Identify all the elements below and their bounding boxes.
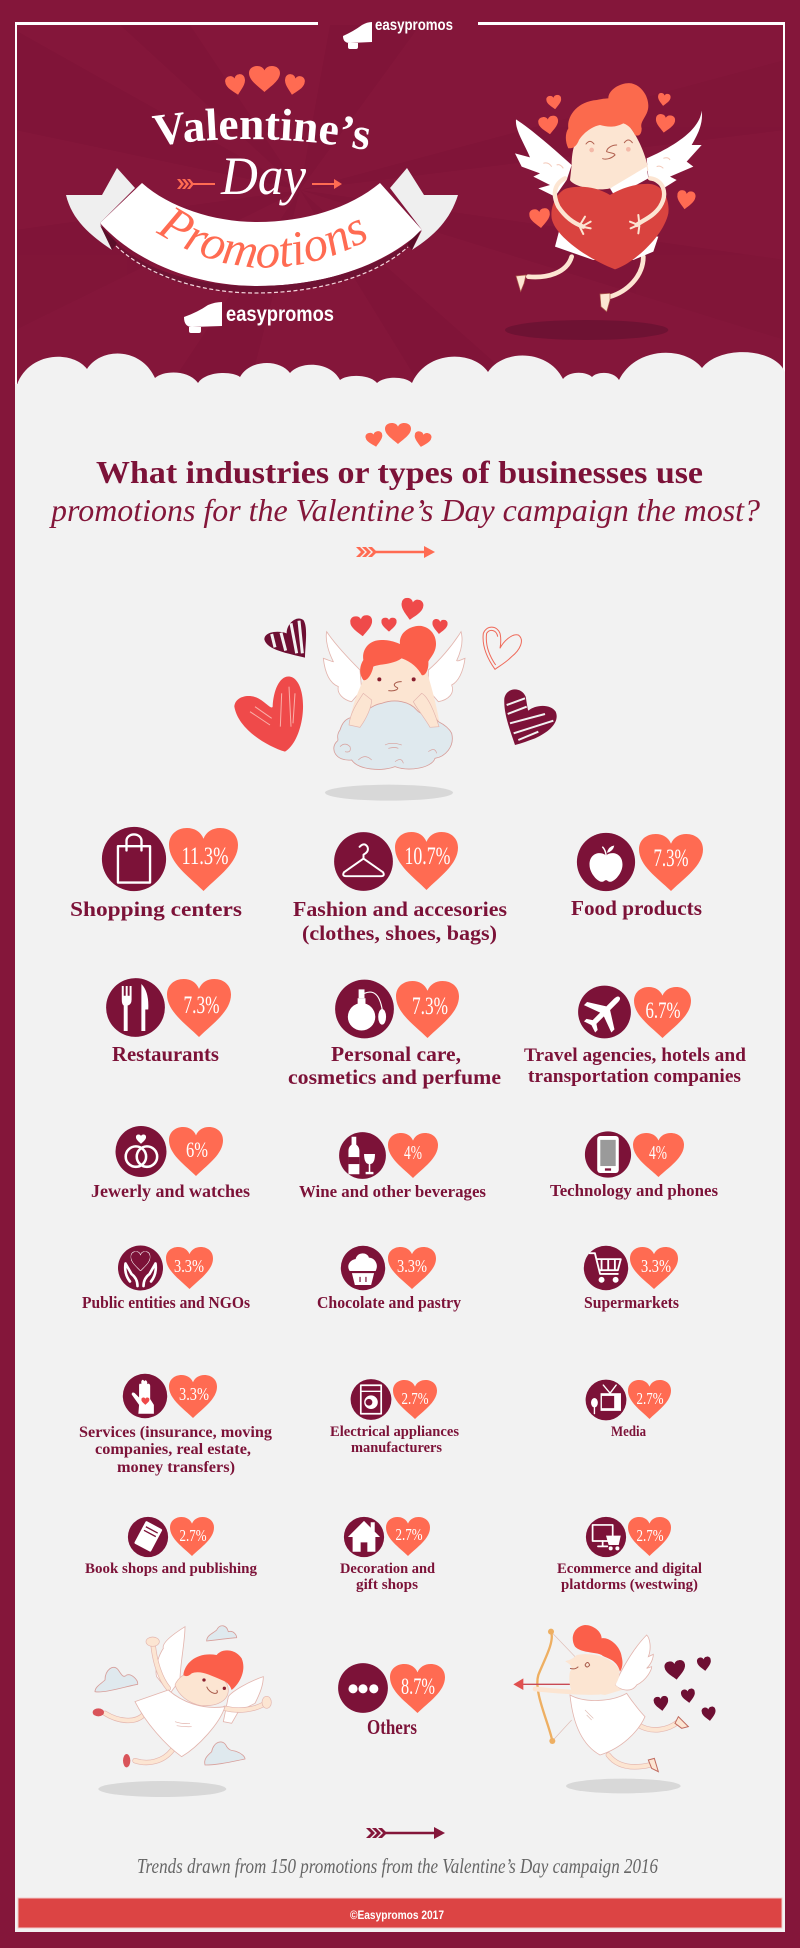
section subheading: promotions for the Valentine’s Day campaign the most? xyxy=(49,492,760,528)
easypromos logo: easypromos xyxy=(226,303,334,326)
illustration: cupid with bow and arrow xyxy=(513,1625,717,1793)
item: services: companies, real estate, xyxy=(95,1441,251,1458)
footer bar xyxy=(18,1898,782,1928)
item: electrical appliances: manufacturers xyxy=(351,1440,442,1456)
item: decoration and gift shops xyxy=(340,1517,436,1593)
item: fashion and accesories: Fashion and accesories xyxy=(293,897,507,921)
item: technology and phones: 4% xyxy=(649,1142,667,1164)
item: ecommerce and digital xyxy=(557,1517,702,1593)
item: personal care xyxy=(288,980,501,1089)
item: chocolate and pastry: 3.3% xyxy=(397,1256,427,1276)
scribble heart red xyxy=(234,677,303,752)
ribbon banner xyxy=(66,168,458,293)
item: shopping centers: Shopping centers xyxy=(70,897,242,921)
section hearts xyxy=(365,423,432,449)
item: personal care: Personal care, xyxy=(331,1042,461,1066)
item: technology and phones xyxy=(550,1131,718,1200)
item: public entities and NGOs xyxy=(82,1246,251,1312)
item: book shops and publishing: 2.7% xyxy=(180,1526,207,1545)
item: jewelry and watches xyxy=(91,1126,250,1201)
item: services: Services (insurance, moving xyxy=(79,1424,272,1441)
scribble heart dark xyxy=(504,689,557,745)
item: food products: Food products xyxy=(571,896,702,920)
title: Promotions: Promotions xyxy=(156,207,366,268)
item: media: Media xyxy=(611,1424,647,1440)
item: electrical appliances xyxy=(330,1379,459,1456)
footer arrow xyxy=(366,1827,445,1839)
item: wine and other beverages: 4% xyxy=(404,1142,422,1164)
item: media xyxy=(586,1380,671,1440)
easypromos logo xyxy=(184,302,334,333)
item: chocolate and pastry: Chocolate and pastry xyxy=(317,1293,462,1312)
scribble heart striped xyxy=(264,619,306,658)
item: personal care: 7.3% xyxy=(412,993,448,1020)
item: jewelry and watches: Jewerly and watches xyxy=(91,1181,250,1201)
item: media: 2.7% xyxy=(636,1389,664,1408)
small easypromos logo xyxy=(343,17,453,49)
item: supermarkets xyxy=(584,1246,680,1312)
illustration: flying cupid with clouds xyxy=(93,1626,271,1797)
header light rays xyxy=(15,25,785,385)
item: decoration and gift shops: 2.7% xyxy=(396,1525,423,1544)
illustration: cupid on a cloud with hearts xyxy=(234,597,557,801)
scribble heart outline xyxy=(483,627,521,669)
item: book shops and publishing xyxy=(85,1517,257,1577)
item: decoration and gift shops: Decoration and xyxy=(340,1561,436,1577)
item: ecommerce and digital: platdorms (westwing) xyxy=(561,1577,698,1593)
item: fashion and accesories: 10.7% xyxy=(404,843,450,870)
item: services xyxy=(79,1374,272,1476)
item: decoration and gift shops: gift shops xyxy=(356,1577,418,1593)
small easypromos logo: easypromos xyxy=(375,17,453,34)
item: ecommerce and digital: 2.7% xyxy=(636,1526,664,1545)
item: electrical appliances: 2.7% xyxy=(402,1389,429,1408)
title hearts xyxy=(224,66,306,97)
item: food products xyxy=(571,833,703,920)
item: shopping centers xyxy=(70,827,242,921)
item: fashion and accesories xyxy=(293,832,507,945)
header frame xyxy=(15,22,785,384)
item: wine and other beverages: Wine and other beverages xyxy=(299,1182,486,1201)
title: Day: Day xyxy=(220,146,306,206)
item: services: money transfers) xyxy=(117,1459,235,1476)
item: others xyxy=(338,1663,445,1739)
item: electrical appliances: Electrical appliances xyxy=(330,1424,459,1440)
source note: Trends drawn from 150 promotions from the Valentine’s Day campaign 2016 xyxy=(137,1854,658,1878)
item: wine and other beverages xyxy=(299,1132,486,1201)
section heading: What industries or types of businesses use xyxy=(96,454,703,490)
item: jewelry and watches: 6% xyxy=(186,1137,208,1162)
item: restaurants: Restaurants xyxy=(112,1042,219,1066)
item: restaurants: 7.3% xyxy=(184,992,220,1019)
item: services: 3.3% xyxy=(179,1384,209,1404)
item: fashion and accesories: (clothes, shoes, bags) xyxy=(302,921,497,945)
item: shopping centers: 11.3% xyxy=(182,843,228,870)
item: food products: 7.3% xyxy=(654,845,688,872)
content panel xyxy=(15,352,785,1932)
item: supermarkets: 3.3% xyxy=(641,1256,671,1276)
item: technology and phones: Technology and phones xyxy=(550,1181,718,1200)
item: ecommerce and digital: Ecommerce and digital xyxy=(557,1561,702,1577)
item: chocolate and pastry xyxy=(317,1246,462,1312)
item: travel agencies: Travel agencies, hotels and xyxy=(524,1045,746,1066)
section arrow xyxy=(356,546,435,558)
item: travel agencies xyxy=(524,983,746,1087)
item: travel agencies: 6.7% xyxy=(646,998,680,1023)
item: public entities and NGOs: Public entities and NGOs xyxy=(82,1293,251,1312)
item: others: Others xyxy=(367,1715,417,1739)
footer bar: ©Easypromos 2017 xyxy=(350,1908,444,1922)
item: restaurants xyxy=(106,978,231,1066)
item: public entities and NGOs: 3.3% xyxy=(174,1256,204,1276)
item: others: 8.7% xyxy=(401,1674,435,1699)
item: book shops and publishing: Book shops and publishing xyxy=(85,1561,257,1577)
title arrow left xyxy=(177,179,215,189)
title: Valentine's: Valentine’s xyxy=(152,108,369,150)
item: supermarkets: Supermarkets xyxy=(584,1293,680,1312)
title arrow right xyxy=(312,179,342,189)
item: personal care: cosmetics and perfume xyxy=(288,1065,501,1089)
cupid holding heart xyxy=(505,83,702,340)
item: travel agencies: transportation companies xyxy=(528,1066,741,1087)
